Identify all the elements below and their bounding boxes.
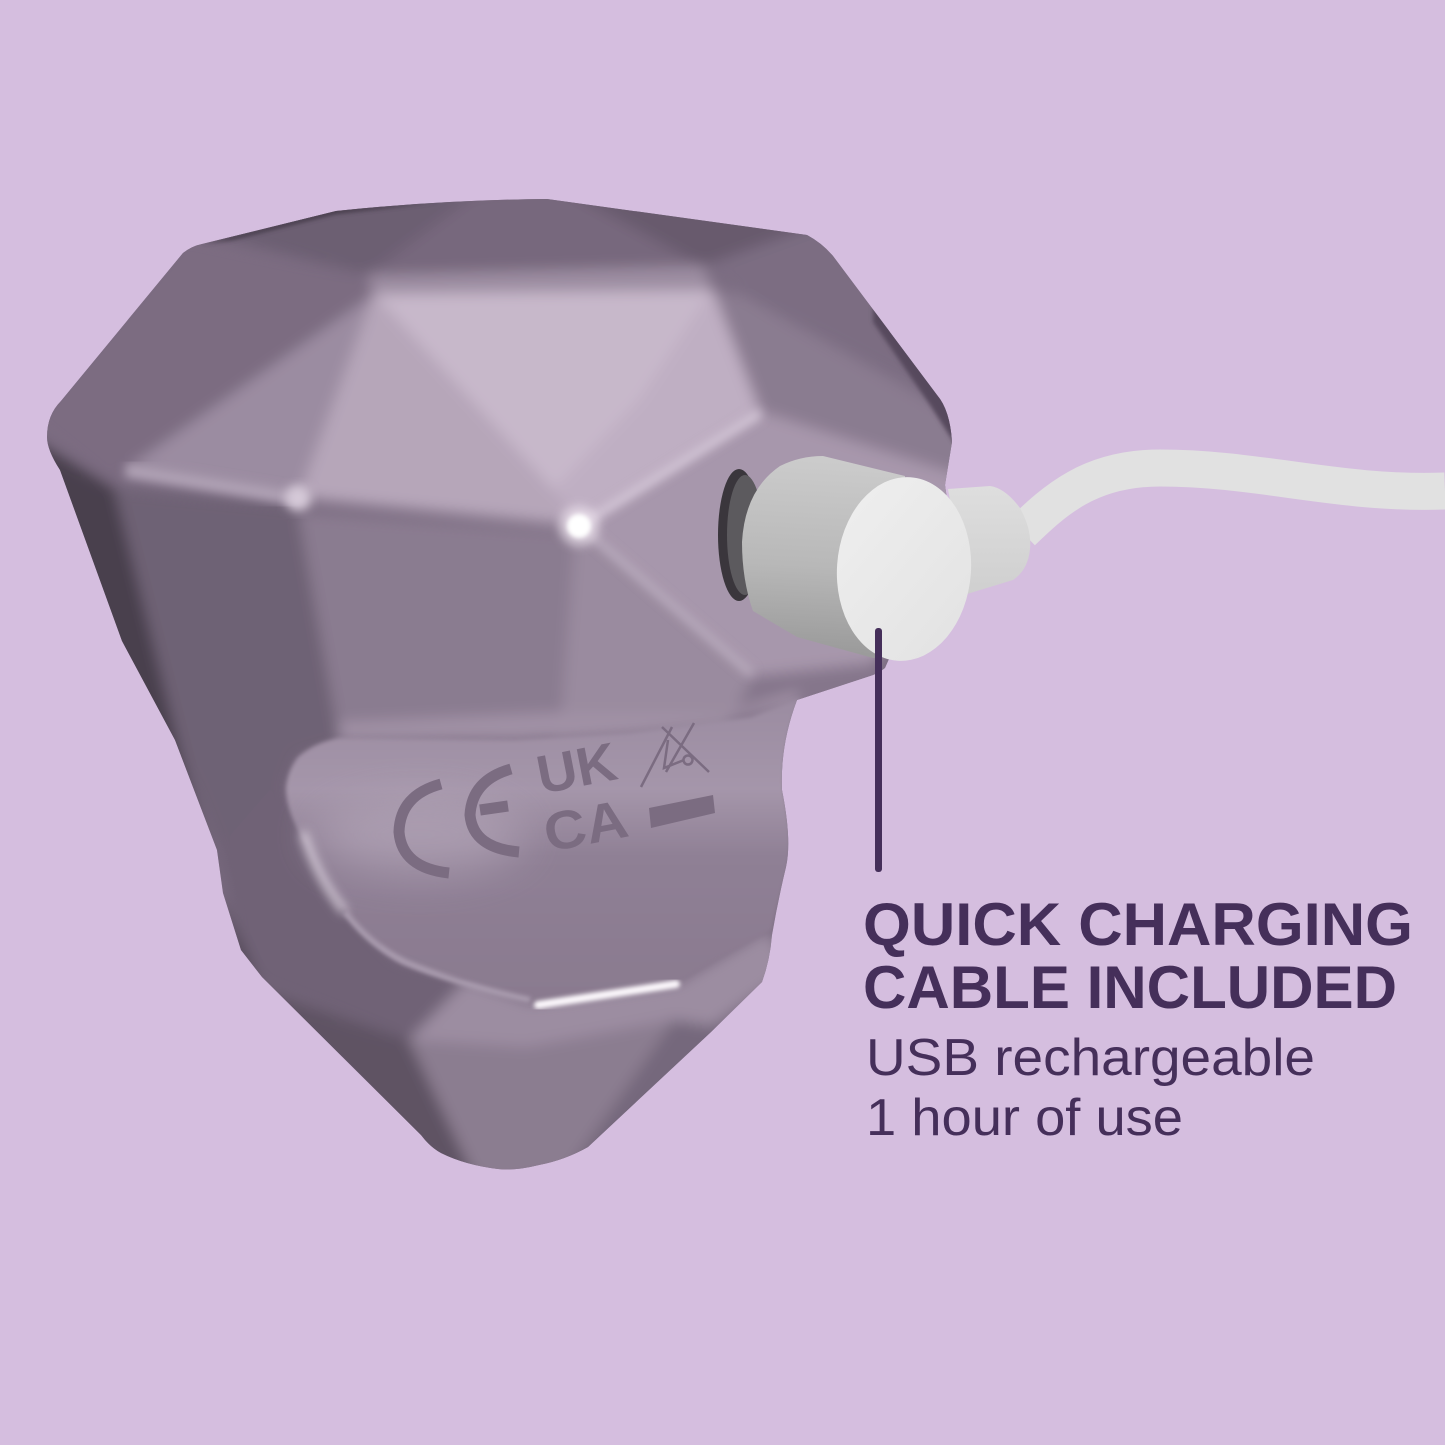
charging cable bbox=[742, 456, 1445, 665]
recess soft light bbox=[315, 797, 525, 873]
callout leader line bbox=[875, 628, 882, 872]
callout body: USB rechargeable bbox=[866, 1029, 1315, 1087]
regulatory markings: crossed-out bin bbox=[641, 723, 715, 828]
regulatory markings: UKCA: UK bbox=[532, 732, 622, 806]
callout heading: CABLE INCLUDED bbox=[863, 954, 1397, 1021]
callout heading bbox=[863, 891, 1413, 1021]
regulatory markings: UKCA: CA bbox=[539, 789, 633, 864]
plug end face bbox=[831, 473, 977, 665]
cable strain relief bbox=[948, 486, 1030, 594]
callout body: 1 hour of use bbox=[866, 1089, 1183, 1147]
infographic canvas bbox=[47, 199, 1445, 1170]
device facets bbox=[30, 180, 975, 1185]
regulatory markings: CE bbox=[399, 769, 519, 873]
product: faceted purple device bbox=[30, 180, 975, 1185]
device body silhouette bbox=[47, 199, 952, 1170]
callout body bbox=[866, 1029, 1315, 1147]
cable wire bbox=[1022, 468, 1445, 532]
callout heading: QUICK CHARGING bbox=[863, 891, 1413, 958]
regulatory markings: UKCA bbox=[532, 732, 633, 864]
top edge dark sliver bbox=[208, 204, 418, 244]
callout text block bbox=[863, 891, 1413, 1147]
right edge dark sliver bbox=[872, 308, 952, 442]
plug barrel bbox=[742, 456, 905, 658]
highlights bbox=[126, 413, 760, 1005]
charging port bbox=[718, 469, 763, 601]
recessed thumb rest bbox=[286, 698, 800, 1003]
